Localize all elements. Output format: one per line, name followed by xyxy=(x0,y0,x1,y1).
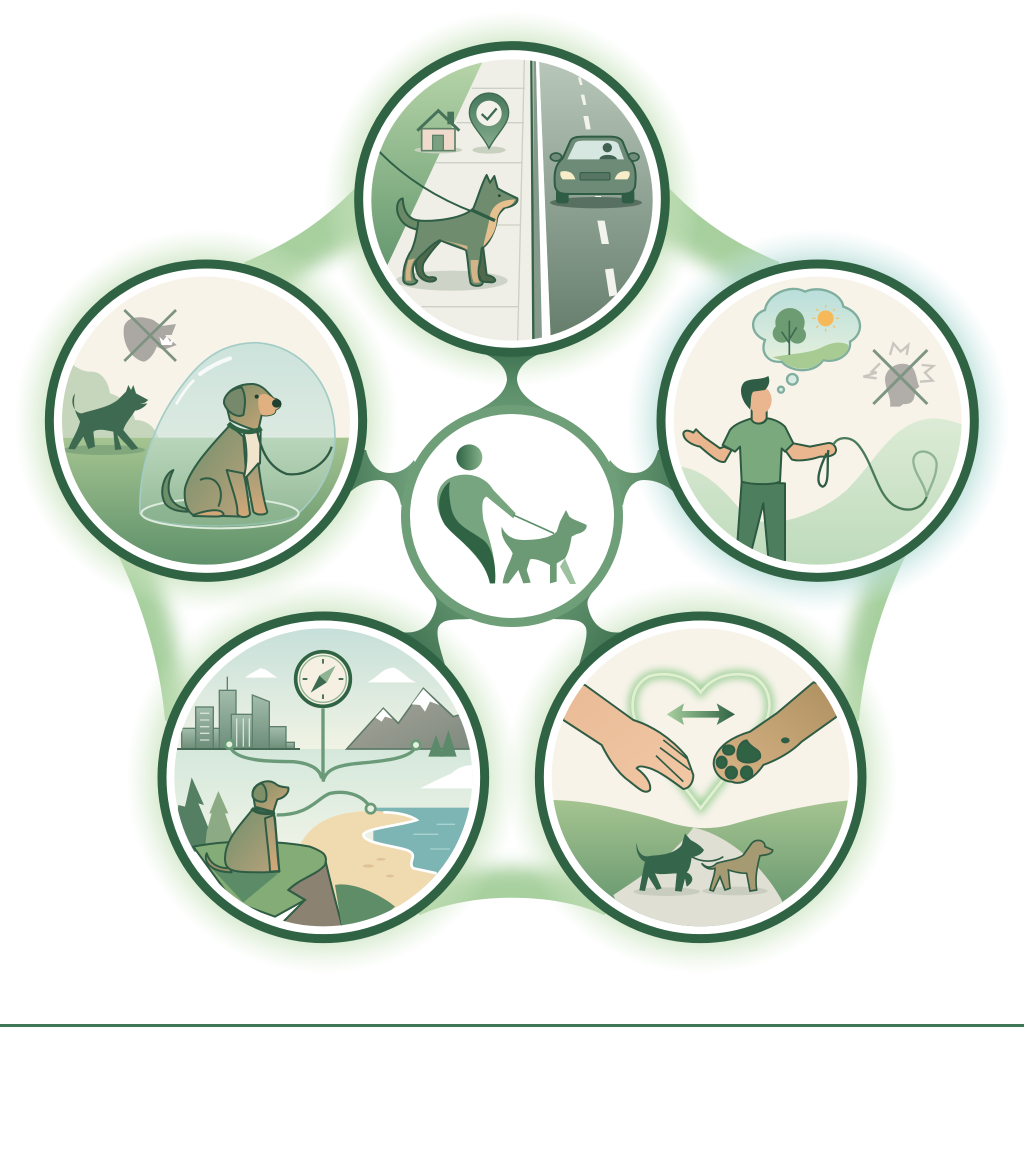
dark dog xyxy=(636,833,704,892)
leash xyxy=(257,428,332,474)
ring xyxy=(162,616,485,939)
pine trees xyxy=(428,730,457,757)
crossed out aggressive dog xyxy=(124,310,177,362)
dog paw xyxy=(714,682,840,783)
panel: centre hub xyxy=(406,410,618,622)
panel: bottom right, hand and paw bond xyxy=(539,616,862,939)
seated dog xyxy=(162,384,280,517)
compass xyxy=(296,652,350,706)
clouds xyxy=(245,668,475,788)
divider line xyxy=(0,1024,1024,1027)
bush xyxy=(335,884,395,927)
man xyxy=(683,407,836,562)
icon: person walking dog xyxy=(437,444,587,584)
ring xyxy=(661,264,974,577)
two way arrow xyxy=(667,703,735,725)
dog on leash xyxy=(397,175,517,286)
glass dome xyxy=(140,343,335,528)
leash in hand xyxy=(818,438,937,510)
crossed out headache xyxy=(863,343,933,407)
pentagon web background xyxy=(118,188,906,915)
ring xyxy=(49,264,363,577)
panel: right, calm owner xyxy=(661,264,974,577)
tan dog xyxy=(702,840,773,891)
thought bubbles xyxy=(778,374,798,393)
lead between dogs xyxy=(692,857,723,861)
panel: bottom left, choosing a direction xyxy=(162,616,485,939)
glowing heart xyxy=(633,674,769,808)
mountains xyxy=(347,688,470,749)
city skyline xyxy=(182,677,294,749)
hills xyxy=(550,800,853,932)
panel: top, walking beside the road xyxy=(359,46,673,352)
ring xyxy=(359,46,665,352)
connectors between hub and panels xyxy=(300,330,724,680)
sea xyxy=(373,808,477,881)
pebbles xyxy=(363,858,394,877)
road dashes xyxy=(578,77,617,297)
cliff xyxy=(193,842,343,928)
thought cloud xyxy=(753,289,860,370)
human hand xyxy=(560,682,693,792)
compass and paths xyxy=(230,708,416,815)
car xyxy=(550,137,642,208)
bushes xyxy=(60,365,158,438)
leash xyxy=(379,152,475,213)
path xyxy=(613,828,783,928)
shadows xyxy=(633,887,768,896)
hills xyxy=(680,418,967,570)
dog shadow xyxy=(396,271,508,291)
distant dog silhouette xyxy=(62,385,148,455)
ring xyxy=(539,616,862,939)
beach xyxy=(300,811,436,912)
location pin xyxy=(469,93,509,154)
house xyxy=(414,111,462,153)
panel: left, safety bubble xyxy=(49,264,363,577)
seated dog looking out xyxy=(206,781,288,872)
left pine trees xyxy=(173,777,233,852)
